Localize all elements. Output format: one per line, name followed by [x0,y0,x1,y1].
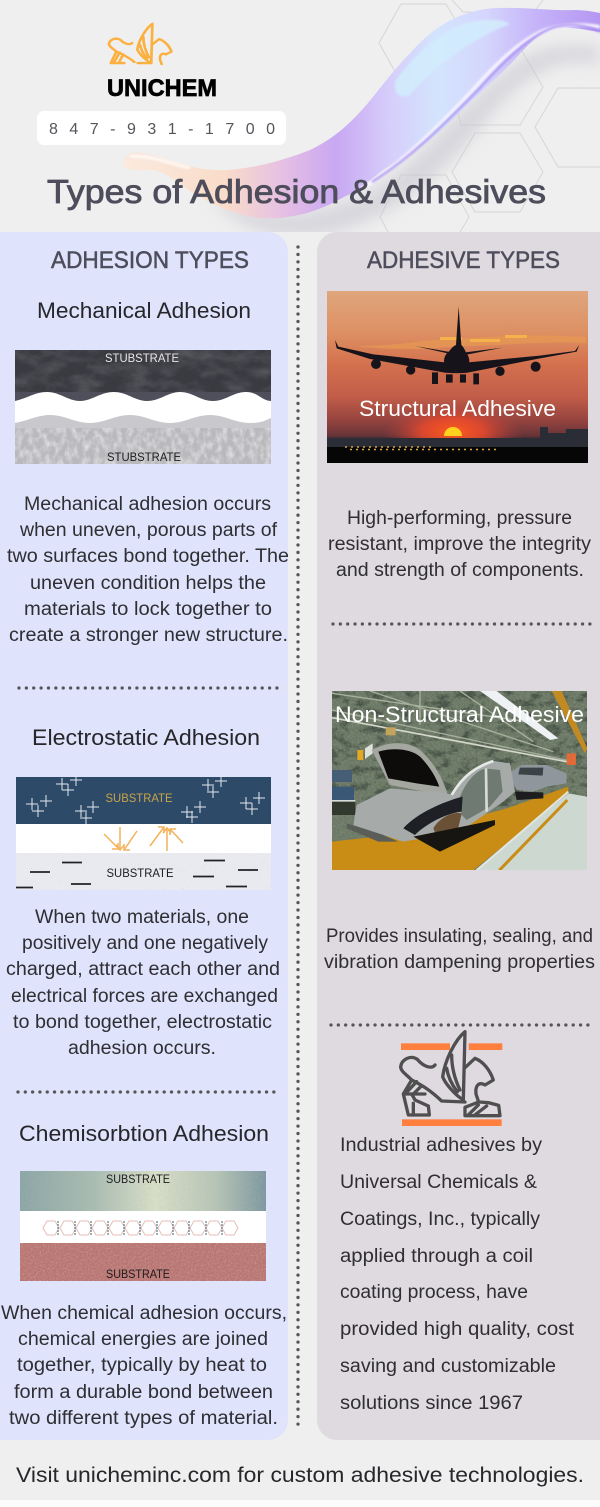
diagram: chemisorbtion adhesion [20,1171,266,1281]
text: company description: provided high quality, cost [340,1319,575,1340]
text: mechanical adhesion description: Mechanical adhesion occurs [24,494,271,515]
text: chemisorbtion adhesion description [1,1303,287,1429]
icon: orange griffin [109,24,172,64]
paint swirl [123,8,600,236]
text: mechanical adhesion description: materials to lock together to [24,599,272,620]
text: company description: Industrial adhesives by [340,1135,543,1156]
panel: adhesion types [0,232,289,1440]
footer call to action: Visit unicheminc.com for custom adhesive technologies. [16,1464,584,1487]
label: bottom substrate: SUBSTRATE [106,866,174,880]
text: company description: coating process, have [340,1282,528,1303]
label: top substrate: SUBSTRATE [106,791,172,805]
text: company description: solutions since 1967 [340,1393,523,1414]
hexagon molecule chain [43,1221,238,1235]
factory floor [332,787,568,870]
photo: airplane at sunset [327,291,588,463]
text: structural adhesive description: resistant, improve the integrity [328,534,592,555]
label: top substrate: STUBSTRATE [105,351,179,365]
distant cars [508,765,567,792]
wordmark: UNICHEM [107,75,217,102]
text: structural adhesive description: High-performing, pressure [347,508,572,529]
label: bottom substrate: SUBSTRATE [106,1267,170,1281]
text: chemisorbtion adhesion description: two different types of material. [9,1408,278,1429]
title: Types of Adhesion & Adhesives [47,173,546,210]
text: mechanical adhesion description: when uneven, porous parts of [19,520,278,541]
text: non-structural adhesive description: vibration dampening properties [324,952,595,973]
icon: griffin logo with orange bars [401,1032,502,1126]
label: top substrate: SUBSTRATE [106,1172,170,1186]
text: company description: Universal Chemicals & [340,1172,537,1193]
text: electrostatic adhesion description: to bond together, electrostatic [13,1012,272,1033]
text: electrostatic adhesion description: charged, attract each other and [6,959,280,980]
photo: car assembly line [332,691,587,870]
heading: adhesion types: ADHESION TYPES [51,247,249,274]
text: mechanical adhesion description: uneven condition helps the [30,573,266,594]
machinery and shelving [332,787,354,801]
car hood and body frame [372,743,448,797]
diagram: electrostatic adhesion [16,774,271,890]
attraction arrows [104,827,183,851]
text: chemisorbtion adhesion description: together, typically by heat to [17,1355,267,1376]
airplane silhouette [335,307,579,384]
text: electrostatic adhesion description: adhesion occurs. [68,1038,216,1059]
negative charges [16,860,258,888]
text: structural adhesive description [328,508,592,581]
heading: electrostatic adhesion: Electrostatic Adhesion [32,725,260,750]
heading: chemisorbtion adhesion: Chemisorbtion Adhesion [19,1121,269,1146]
text: mechanical adhesion description: create a stronger new structure. [9,625,288,646]
text: company description [340,1135,575,1414]
text: structural adhesive description: and strength of components. [336,560,584,581]
text: electrostatic adhesion description [6,907,280,1059]
photo label: Structural Adhesive [359,396,556,421]
text: company description: Coatings, Inc., typically [340,1209,541,1230]
text: mechanical adhesion description [7,494,289,646]
text: company description: saving and customizable [340,1356,556,1377]
text: electrostatic adhesion description: electrical forces are exchanged [11,986,278,1007]
phone number pill [37,111,286,145]
text: electrostatic adhesion description: When two materials, one [35,907,249,928]
text: chemisorbtion adhesion description: When chemical adhesion occurs, [1,1303,287,1324]
heading: adhesive types: ADHESIVE TYPES [367,247,560,274]
positive charges [26,774,265,824]
label: bottom substrate: STUBSTRATE [107,450,181,464]
skyline and runway lights [327,427,588,447]
text: chemisorbtion adhesion description: form a durable bond between [14,1382,273,1403]
text: non-structural adhesive description [324,926,595,973]
molecule bonds [58,1221,222,1235]
text: chemisorbtion adhesion description: chemical energies are joined [18,1329,268,1350]
logo: orange griffin and wordmark [107,24,217,102]
diagram: mechanical adhesion [15,350,271,464]
heading: mechanical adhesion: Mechanical Adhesion [37,298,251,323]
text: electrostatic adhesion description: positively and one negatively [22,933,269,954]
phone number pill: 847-931-1700 [49,121,275,138]
photo label: Non-Structural Adhesive [335,702,584,727]
text: company description: applied through a coil [340,1246,533,1267]
text: non-structural adhesive description: Provides insulating, sealing, and [326,926,593,947]
decorative hexagon pattern [379,0,600,256]
text: mechanical adhesion description: two surfaces bond together. The [7,546,289,567]
panel: adhesive types [317,232,600,1440]
ceiling beams [332,691,570,761]
